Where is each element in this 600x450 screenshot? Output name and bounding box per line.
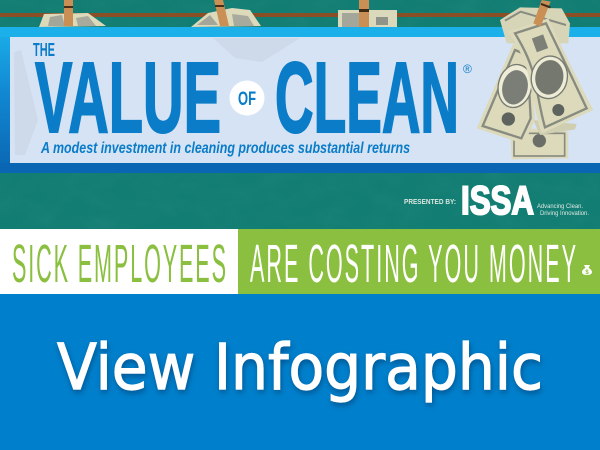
clothesline rope [0, 13, 600, 17]
icon: right clipped bill [338, 0, 397, 27]
panel: sick employees white label [0, 229, 238, 294]
call to action text: View Infographic [57, 331, 543, 404]
badge: of [230, 80, 264, 116]
title: The: THE [33, 40, 55, 60]
panel: blue title banner [0, 27, 600, 173]
panel: call to action blue [0, 294, 600, 450]
heading: are costing you money: ARE COSTING YOU MONEY [250, 233, 576, 294]
logo tagline: Advancing Clean. [537, 204, 583, 210]
logo tagline: Driving Innovation. [540, 211, 589, 217]
logo: ISSA: ISSA [461, 179, 534, 223]
heading: sick employees: SICK EMPLOYEES [12, 233, 226, 294]
icon: money bag [582, 265, 592, 276]
panel: teal textured background [0, 0, 600, 229]
icon: middle clipped bills [191, 0, 261, 27]
badge: of: OF [238, 89, 256, 110]
subtitle: A modest investment in cleaning produces substantial returns [40, 140, 410, 157]
title: Value: VALUE [35, 42, 221, 154]
presented by label: PRESENTED BY: [404, 197, 456, 206]
icon: hanging money bundle [477, 0, 593, 159]
panel: costing money green label [238, 229, 600, 294]
icon: money bag: $ [585, 270, 589, 276]
icon: left clipped bills [39, 0, 106, 27]
registered mark: ® [463, 62, 472, 76]
logo tagline [537, 204, 589, 217]
